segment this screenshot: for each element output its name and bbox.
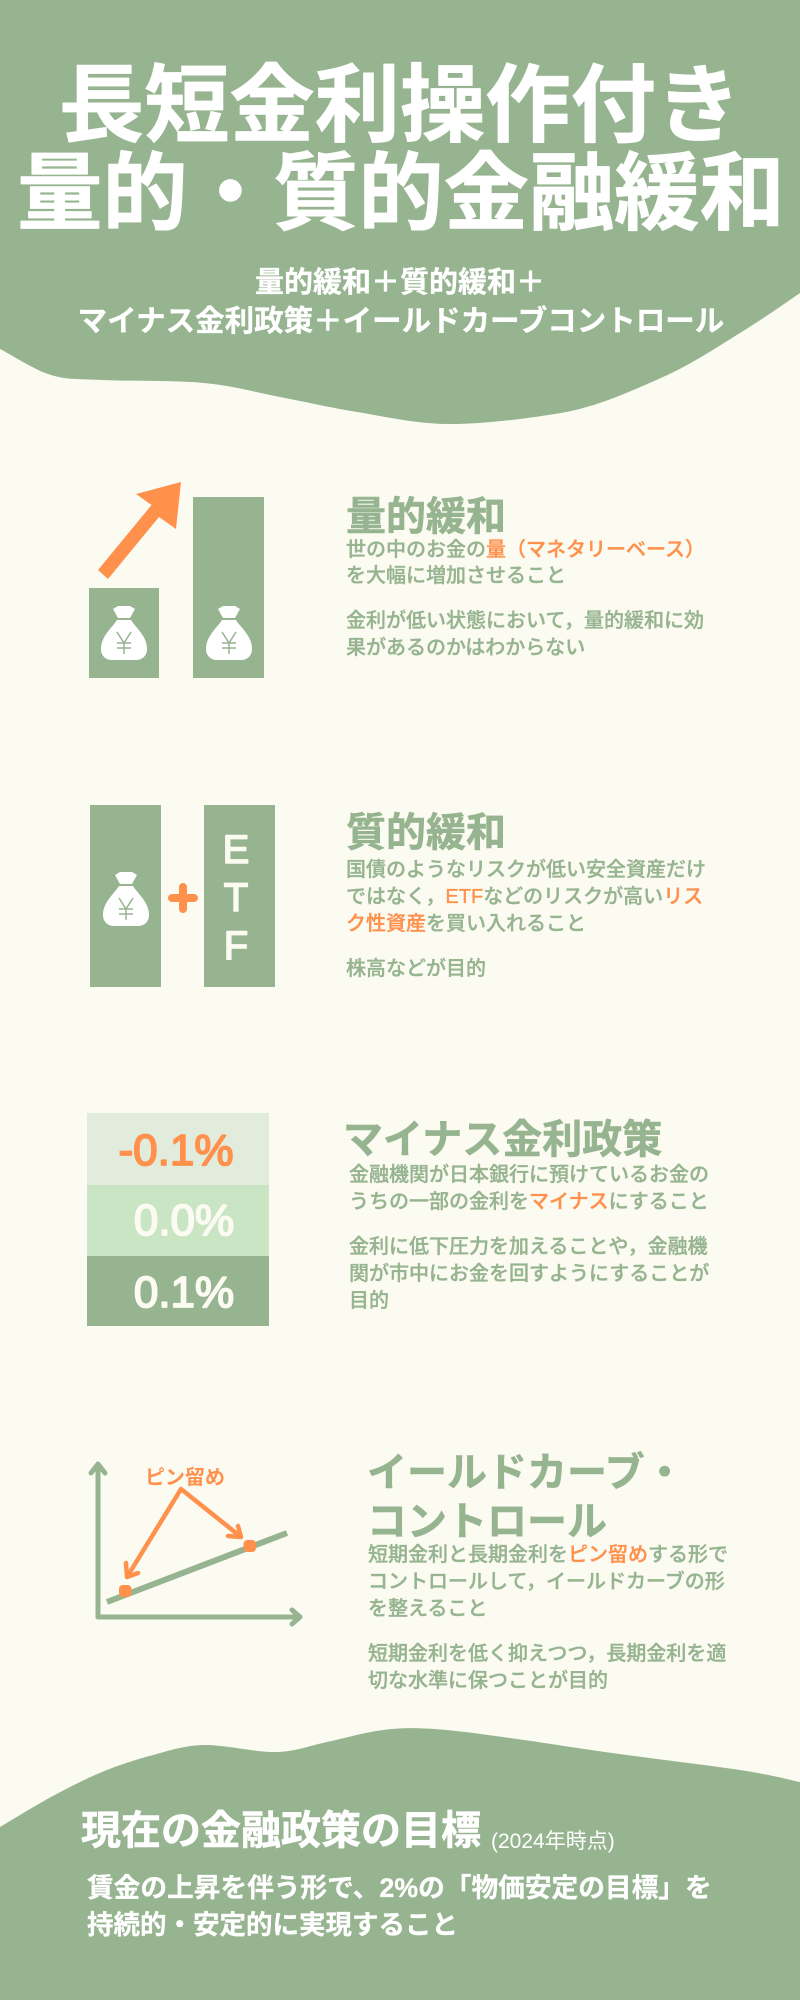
icon: money bag plus ETF <box>90 805 275 987</box>
chart: interest rate stack <box>87 1113 269 1326</box>
text: qualitative easing description: ではなく，ETFなどのリスクが高いリス <box>346 885 703 908</box>
text: quantitative easing description: 果があるのかはわからない <box>346 636 585 659</box>
text: qualitative easing description: 株高などが目的 <box>346 957 486 980</box>
text: yield curve control description <box>368 1543 728 1692</box>
title: 長短金利操作付き <box>59 59 741 154</box>
text: negative interest rate description: うちの一部の金利をマイナスにすること <box>349 1190 709 1213</box>
heading: yield curve control: コントロール <box>367 1500 607 1544</box>
text: yield curve control description: を整えること <box>368 1597 487 1620</box>
icon: money bag large <box>206 606 252 660</box>
heading: negative interest rate policy: マイナス金利政策 <box>343 1118 662 1162</box>
section: yield curve control <box>91 1451 728 1692</box>
chart: yield curve with pins <box>91 1464 300 1624</box>
footer heading: 現在の金融政策の目標 <box>81 1809 481 1853</box>
label: ETF: E <box>223 828 249 872</box>
text: quantitative easing description: 世の中のお金の量（マネタリーベース） <box>346 538 705 561</box>
heading: yield curve control: イールドカーブ・ <box>367 1451 685 1495</box>
tier: 0.0%: 0.0% <box>134 1196 234 1245</box>
text: qualitative easing description: 国債のようなリスクが低い安全資産だけ <box>346 858 706 881</box>
label: pin: ピン留め <box>145 1466 225 1489</box>
label: ETF: F <box>224 924 248 968</box>
header panel <box>0 0 800 424</box>
bar with money bag <box>90 805 161 987</box>
text: yield curve control description: 短期金利を低く抑えつつ，長期金利を適 <box>368 1642 726 1665</box>
tier: -0.1%: -0.1% <box>119 1126 233 1175</box>
icon: money bag <box>103 872 149 926</box>
label: ETF: T <box>224 876 248 920</box>
icon: plus <box>172 887 194 909</box>
title <box>17 59 785 242</box>
footer text: 持続的・安定的に実現すること <box>87 1910 458 1940</box>
text: qualitative easing description <box>346 858 706 980</box>
heading: yield curve control <box>367 1451 685 1544</box>
footer text <box>87 1873 712 1940</box>
subtitle: 量的緩和＋質的緩和＋ <box>255 266 545 299</box>
section: qualitative easing <box>90 805 706 987</box>
footer panel <box>0 1728 800 2000</box>
icon: rising bars with money bags and arrow <box>89 482 264 678</box>
text: yield curve control description: コントロールして，イールドカーブの形 <box>368 1569 725 1593</box>
footer text: 賃金の上昇を伴う形で、2%の「物価安定の目標」を <box>87 1873 712 1903</box>
text: quantitative easing description <box>346 538 705 659</box>
small bar <box>89 588 159 678</box>
heading: qualitative easing: 質的緩和 <box>346 811 506 855</box>
tier: 0.1% <box>87 1256 269 1326</box>
arrow: increase <box>98 482 181 579</box>
subtitle <box>78 266 724 338</box>
section: quantitative easing <box>89 482 705 678</box>
arrows to pins <box>126 1489 241 1577</box>
pin dots <box>119 1540 256 1597</box>
tier: 0.1%: 0.1% <box>134 1268 234 1317</box>
text: negative interest rate description <box>349 1163 709 1312</box>
subtitle: マイナス金利政策＋イールドカーブコントロール <box>78 304 724 338</box>
text: yield curve control description: 切な水準に保つことが目的 <box>368 1669 608 1692</box>
heading: quantitative easing: 量的緩和 <box>346 495 506 539</box>
tier: 0.0% <box>87 1185 269 1256</box>
axes <box>91 1464 300 1624</box>
yield curve line <box>107 1533 287 1602</box>
text: negative interest rate description: 目的 <box>349 1289 389 1312</box>
text: negative interest rate description: 関が市中にお金を回すようにすることが <box>349 1262 709 1285</box>
section: negative interest rate policy <box>87 1113 709 1326</box>
text: negative interest rate description: 金融機関が日本銀行に預けているお金の <box>349 1163 709 1186</box>
tier: -0.1% <box>87 1113 269 1185</box>
text: quantitative easing description: を大幅に増加させること <box>346 564 566 587</box>
tall bar <box>193 497 264 678</box>
text: negative interest rate description: 金利に低下圧力を加えることや，金融機 <box>349 1235 708 1258</box>
title: 量的・質的金融緩和 <box>17 147 785 242</box>
text: quantitative easing description: 金利が低い状態において，量的緩和に効 <box>346 609 704 632</box>
label: ETF <box>223 828 249 968</box>
icon: money bag small <box>101 606 147 660</box>
footer wave background <box>0 1728 800 2000</box>
text: yield curve control description: 短期金利と長期金利をピン留めする形で <box>368 1543 728 1566</box>
footer note: as of 2024: (2024年時点) <box>491 1830 615 1853</box>
bar with ETF <box>204 805 275 987</box>
text: qualitative easing description: ク性資産を買い入れること <box>346 912 586 935</box>
header wave background <box>0 0 800 424</box>
